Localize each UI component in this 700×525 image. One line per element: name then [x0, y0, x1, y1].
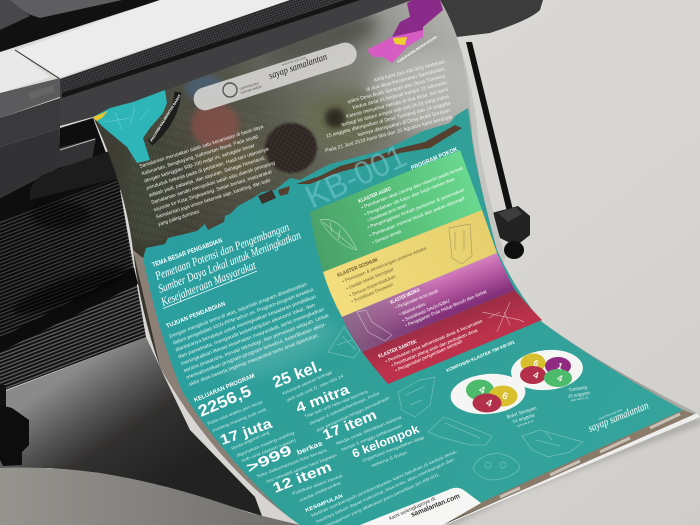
- cluster: saintek: • Pembuatan peta administrasi desa & kecamatan: [384, 318, 483, 364]
- stat: 25 kel.: [270, 358, 345, 403]
- stat: 4 mitra: Tiap sub unit rata-rata bermitra: [304, 389, 369, 419]
- cluster: agro: • Pengolahan ubi kayu dan hasil olahan ikan: [364, 176, 456, 217]
- heading: tema besar: Sumber Daya Lokal untuk Meningkatkan: [156, 228, 303, 296]
- stat: 12 item: 12 item: [270, 458, 334, 496]
- teal haze: [225, 320, 334, 380]
- composition: Tumiang: 6: [532, 358, 540, 369]
- composition: Tumiang: 1: [556, 361, 564, 372]
- stat: 4 mitra: dengan 4 sekolah/lembaga, mulai: [308, 390, 380, 426]
- white website box: [360, 488, 481, 525]
- cluster: agro: • Sosialisasi jenis tanah: [367, 202, 408, 223]
- text: tujuan pengabdian: merealisasikan program-program tersebut, keterlibatan aktor-: [185, 321, 328, 381]
- text: about team KB-001: Kedua desa ini berjarak hampir 15 kilometer: [352, 80, 448, 111]
- torn brown streaks: [205, 125, 462, 230]
- stat: 4 mitra: dari pemerintah hingga perusahaan: [315, 395, 391, 433]
- stat: 17 item: hampir 6 minggu pelaksanaan: [341, 423, 403, 452]
- cluster: soshum: [323, 210, 497, 317]
- stat: 12 item: Publikasi dalam bentuk: [292, 473, 344, 496]
- floor shadow along paper edge: [445, 420, 700, 525]
- printer: back dark panel: [0, 0, 160, 52]
- stat: 25 kel.: Kelompok sasaran tertinggi: [281, 369, 333, 396]
- composition: Tumiang: sub-unit C, D: [571, 395, 589, 402]
- icon: totem: [449, 224, 472, 264]
- cluster: soshum: • Sosialisasi Desawan: [350, 282, 394, 304]
- floor: shadow under poster: [0, 337, 262, 516]
- stat: >999 berkas: [244, 440, 338, 484]
- text: about Samalantan: dengan ketinggian 500-700 mdpl ini, sebagian besar: [143, 143, 256, 184]
- paper curl behind right edge: [460, 45, 506, 260]
- printer: front body: [0, 0, 440, 198]
- printer: white top panels: [0, 0, 290, 93]
- map: kabupaten bengkayang: KABUPATEN BENGKAYANG: [396, 35, 438, 64]
- stat: 2256,5: 2256,5: [196, 383, 254, 421]
- stat: 17 item: [320, 406, 403, 452]
- text: tujuan pengabdian: Dengan mengikuti tema di atas, sejumlah program direalisasikan: [169, 282, 308, 340]
- text: about Samalantan: yang paling dominan.: [158, 208, 201, 228]
- icon: leaf: [320, 219, 357, 250]
- composition: Bukit Serayan: 4: [484, 398, 494, 410]
- text: tujuan pengabdian: [166, 278, 335, 388]
- heading: keluaran program: KELUARAN PROGRAM: [193, 373, 256, 404]
- logo pill: UNIVERSITAS: [239, 81, 259, 91]
- cluster: soshum: • Pemetaan & perancangan potensi wisata: [342, 245, 427, 284]
- cluster: soshum: • Sensus Kependudukan: [348, 274, 397, 298]
- cluster: soshum: KLASTER SOSHUM: [337, 257, 379, 279]
- stat: 17 juta: Rerata anggaran yang: [230, 429, 270, 451]
- heading: tema besar: TEMA BESAR PENGABDIAN: [151, 237, 224, 269]
- heading: tema besar: [151, 220, 303, 309]
- heading: tema besar: Pemetaan Potensi dan Pengembangan: [152, 220, 291, 283]
- printer: dark recess: [0, 118, 130, 222]
- icon: woven roof: [328, 327, 360, 358]
- logo pill: GADJAH MADA: [240, 85, 262, 95]
- cluster: medika: • Pengenalan tensi darah: [395, 288, 439, 310]
- cluster: saintek: • Pengenalan pengelolaan sampah: [394, 338, 464, 373]
- cluster: agro: • Pengringgisan limbah pertanian & peternakan: [367, 187, 466, 230]
- text: about team KB-001: yakni Desa Bukit Serayan dan Desa Tumiang.: [347, 73, 447, 105]
- cluster: medika: KLASTER MEDIKA: [389, 287, 421, 306]
- text: tujuan pengabdian: meningkatkan literasi kesehatan masyarakat, serta meningkatkan: [180, 307, 325, 367]
- text: about team KB-001: KKN kami (tim KB-001) berlokasi: [373, 59, 446, 84]
- stat: 25 kel.: 25 kel.: [270, 358, 324, 392]
- text: about team KB-001: Karena menyebar merata di dua desa, tim kami: [345, 87, 449, 120]
- logo emblem: [223, 83, 237, 97]
- text: about team KB-001: 15 anggota ditempatkan di Desa Tumiang dan 14 anggota: [326, 100, 452, 140]
- text: about Samalantan: adalah padi, palawija, dan sayuran. Sebagai hinterland,: [148, 155, 266, 199]
- stat: 4 mitra: 4 mitra: [293, 381, 352, 416]
- floor: foreground concrete: [0, 468, 300, 525]
- decorative line icons: [328, 327, 583, 480]
- stat: 17 juta: 17 juta: [218, 415, 274, 448]
- logo pill: [191, 40, 360, 113]
- white website box: samalantan.com: [410, 493, 461, 519]
- panel: program pokok: [310, 147, 542, 384]
- stat: 17 item: Media cetak diletakkan selama: [335, 414, 403, 446]
- cluster: medika: • Vaksinasi rabies: [398, 301, 427, 317]
- map: kabupaten bengkayang: [367, 0, 443, 64]
- printer: mesh basket: [0, 178, 146, 392]
- text: kesimpulan: Melihat sumbangsih pemberdayaan kami lakukan di kedua desa,: [310, 449, 458, 518]
- text: about Samalantan: Samalantan sendiri merupakan salah satu daerah penopang: [151, 160, 276, 206]
- cluster: soshum: • Gedah Mada Mengajar: [345, 266, 395, 291]
- stat: 4 mitra: [293, 381, 391, 433]
- composition: Bukit Serayan: Bukit Serayan: [506, 405, 538, 421]
- cluster: agro: • Pemberian obat cacing dan vitamin pada ternak: [361, 165, 464, 210]
- printer: caster wheel: [0, 385, 29, 466]
- stat: 17 juta: [218, 415, 297, 463]
- teal background with torn edge: [143, 108, 683, 525]
- cluster: agro: • Pembuatan mineral block dan pakan alternatif: [369, 196, 466, 238]
- composition: Bukit Serayan: 4: [477, 385, 487, 397]
- cluster: medika: [342, 253, 515, 352]
- icon: blade box: [428, 417, 492, 445]
- text: tujuan pengabdian: aktor desa beserta segenap masyarakat tentu amat diperlukan.: [188, 332, 320, 388]
- cluster: saintek: • Pembuatan plang arah dan perbaikan desa: [390, 328, 479, 368]
- text: kesimpulan: [305, 449, 458, 525]
- text: about team KB-001: di dua desa Kecamatan Samalantan,: [366, 66, 446, 93]
- text: about Samalantan: Samalantan merupakan salah satu kecamatan di barat daya: [139, 124, 264, 170]
- text: about Samalantan: [139, 124, 283, 228]
- stat: 17 item: 17 item: [320, 406, 379, 443]
- stat: 17 juta: sub-unit (dalam rupiah): [241, 437, 297, 463]
- footer script logo: KKN-PPM UGM 2019: [598, 408, 623, 421]
- composition: Bukit Serayan: [449, 371, 541, 430]
- icon: basket: [522, 430, 583, 457]
- text: tujuan pengabdian: TUJUAN PENGABDIAN: [166, 301, 226, 330]
- cluster: saintek: KLASTER SAINTEK: [378, 339, 418, 360]
- text: about Samalantan: Kalimantan, Bengkayang, Kalimantan Barat. Pada sayap: [141, 134, 259, 177]
- composition: Bukit Serayan: 14 anggota: [512, 412, 536, 424]
- text: about team KB-001: terbagi ke dalam empat sub-unit (A-D) yang mana: [341, 94, 450, 128]
- paper lower white edge: [438, 413, 700, 525]
- printer: stand arm and foot: [466, 42, 530, 262]
- icon: pot: [473, 453, 520, 480]
- stat: 25 kel.: oleh sub-unit D, rata-rata 14: [285, 373, 345, 403]
- cluster: medika: • Sosialisasi DAGUSIBU: [401, 298, 450, 323]
- text: tujuan pengabdian: diantaranya berupaya untuk meningkatkan kesadaran pendidikan: [175, 294, 317, 353]
- text: about Samalantan: penduduk bekerja pada di pertanian. Hasil tani utamanya: [146, 146, 270, 192]
- composition: Tumiang: Tumiang: [568, 384, 588, 394]
- cluster: medika: • Pengajaran Pola Hidup Bersih dan Sehat: [404, 289, 488, 328]
- panel heading: PROGRAM POKOK: [410, 147, 459, 172]
- icon: crossed blades: [482, 302, 524, 332]
- composition: Tumiang: [509, 347, 591, 403]
- stat: 12 item: [270, 458, 344, 503]
- cluster: saintek: [362, 290, 542, 384]
- text: about team KB-001: Pada 21 Juni 2019 kami tiba dan 10 Agustus kami beranjak: [324, 114, 454, 154]
- stat: 2256,5: [196, 383, 268, 433]
- text: tujuan pengabdian: dan pariwisata, mengaudit keberlanjutan ekonomi lokal, dan: [177, 302, 316, 360]
- composition: Bukit Serayan: 6: [500, 391, 510, 403]
- composition: Bukit Serayan: sub-unit A, B: [516, 419, 534, 428]
- heading: tema besar: Kesejahteraan Masyarakat: [158, 258, 258, 309]
- stat: >999 berkas: foto mewakili sparasi hasil kegiatan: [266, 452, 338, 484]
- stat: 6 kelompok: 6 kelompok: [350, 422, 421, 461]
- text: about Samalantan: Samalantan juga umum beternak sapi, kambing, dan babi: [155, 178, 271, 220]
- map: provinsi kalimantan barat: [93, 90, 182, 163]
- icon: bottle: [357, 310, 392, 341]
- composition: Tumiang: 4: [532, 370, 540, 381]
- text: kesimpulan: KESIMPULAN: [305, 493, 344, 514]
- stat: >999 berkas: Teks dokumentasi foto kerapa: [256, 447, 328, 479]
- icon: mask house: [398, 377, 435, 417]
- cluster: agro: • Sensus ternak: [372, 228, 403, 245]
- text: kesimpulan: hasilnya belum dapat maksimal, bisa kota, atau membangun dan: [315, 456, 456, 524]
- text: about team KB-001: lainnya ditempatkan di Desa Bukit Serayan.: [357, 107, 452, 138]
- watermark KB-001: KB-001: [299, 137, 412, 215]
- text: about team KB-001: [310, 59, 460, 154]
- stat: 6 kelompok: selama 6 bulan: [371, 449, 409, 468]
- stat: 2256,5: Rata-rata waktu jam kerja: [207, 399, 264, 426]
- footer script logo: sayap samalantan: [587, 400, 651, 435]
- map: provinsi kalimantan barat: PROVINSI KALIMANTAN BARAT: [149, 93, 182, 143]
- cluster: agro: KLASTER AGRO: [358, 186, 392, 205]
- text: tujuan pengabdian: dalam pengabdian KKN-PPM tahun ini. Program-program tersebut: [172, 287, 315, 346]
- composition: Tumiang: 15 anggota: [568, 390, 591, 399]
- heading: komposisi klaster: KOMPOSISI KLASTER TIM KB-001: [445, 339, 516, 373]
- stat: 12 item: media elektronika.: [298, 480, 342, 503]
- stat: >999 berkas: berkas: [296, 440, 324, 457]
- composition: Tumiang: 4: [556, 373, 564, 384]
- text: about Samalantan: sayuran ke Kota Singkawang. Selain bertani, masyarakat: [153, 169, 273, 213]
- text: tujuan pengabdian: sarana prasarana, inovasi teknologi, dan pemetaan wilayah. Untuk: [183, 313, 330, 374]
- white website box: kami selengkapnya di:: [388, 496, 437, 522]
- stat: 2256,5: masing-masing sub-unit.: [212, 406, 268, 433]
- stat: 17 juta: digunakan masing-masing: [236, 430, 296, 458]
- logo pill: KKN-PPM UGM 2019: [281, 55, 307, 67]
- logo pill: sayap samalantan: [267, 52, 329, 82]
- printer: right end of body: [440, 0, 543, 37]
- stat: >999 berkas: >999: [244, 441, 294, 476]
- stat: 6 kelompok: Organisasi mengadakan tatap: [362, 434, 426, 463]
- cluster: agro: [310, 150, 482, 272]
